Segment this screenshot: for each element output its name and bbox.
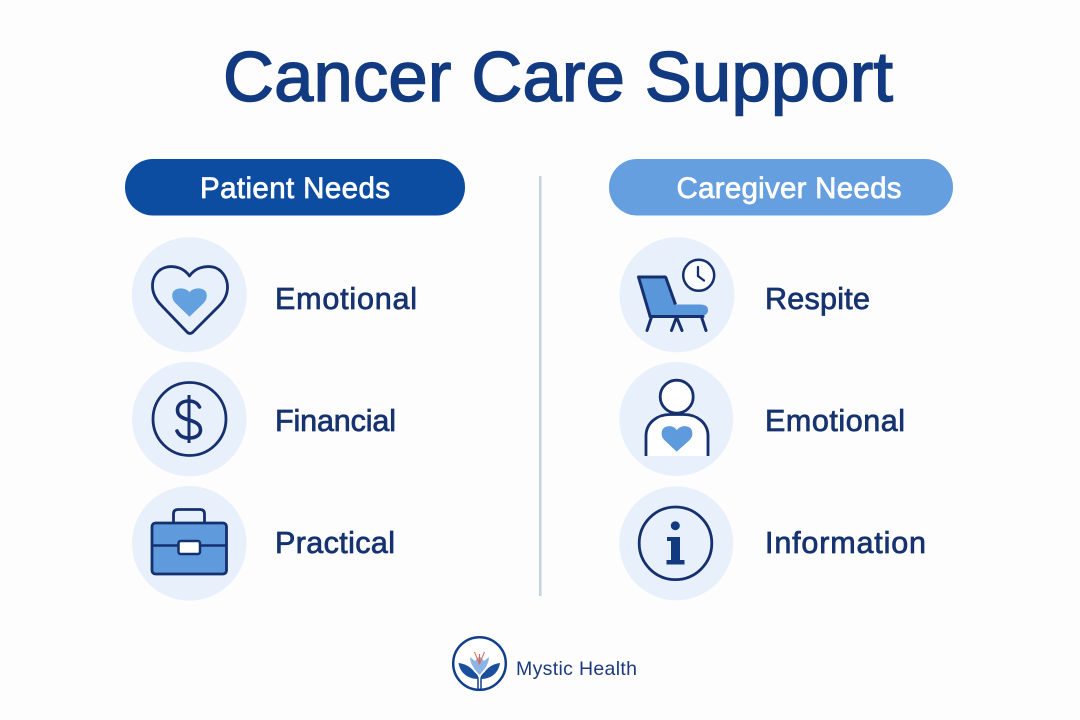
item: emotional [132, 237, 417, 352]
item: emotional [619, 362, 905, 476]
icon: info [639, 507, 712, 580]
item: respite: Respite [765, 282, 870, 316]
icon: lotus [453, 637, 506, 690]
heading: caregiver needs: Caregiver Needs [676, 172, 902, 205]
panel: caregiver needs [609, 159, 953, 600]
heading: patient needs [125, 159, 465, 216]
heading: patient needs: Patient Needs [200, 172, 390, 205]
item: information: Information [765, 526, 926, 560]
icon: person with heart [646, 380, 708, 456]
item: emotional: Emotional [765, 404, 905, 438]
icon: briefcase [152, 510, 226, 574]
panel: patient needs [125, 159, 465, 601]
item: financial [132, 362, 396, 476]
item: practical [132, 486, 395, 601]
item: respite [620, 237, 870, 352]
divider [539, 176, 542, 596]
logo: Mystic Health [453, 637, 637, 690]
icon: dollar [153, 382, 226, 456]
heading: caregiver needs [609, 159, 953, 216]
item: information [619, 486, 926, 600]
icon: heart [152, 267, 228, 334]
item: emotional: Emotional [275, 282, 417, 316]
title: Cancer Care Support [223, 37, 893, 116]
logo: Mystic Health: Mystic Health [516, 658, 637, 680]
icon: chair and clock [638, 260, 714, 330]
item: financial: Financial [275, 404, 396, 438]
item: practical: Practical [275, 526, 395, 560]
